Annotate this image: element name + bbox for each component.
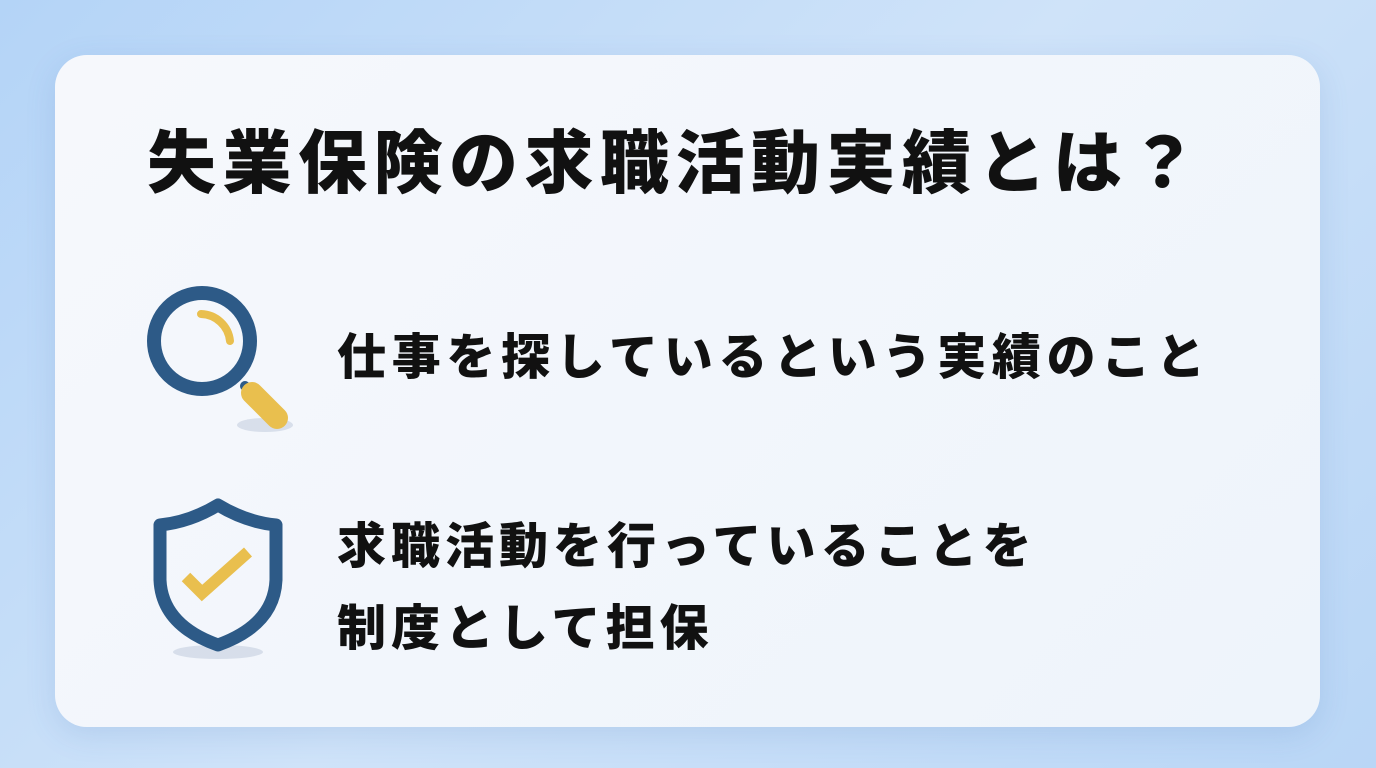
title: 失業保険の求職活動実績とは？	[147, 125, 1204, 202]
text: line 2: 求職活動を行っていることを	[337, 520, 1037, 574]
icon: magnifier	[147, 286, 293, 432]
icon: shield check	[154, 498, 282, 659]
text: line 1: 仕事を探しているという実績のこと	[337, 331, 1211, 385]
text: line 2	[337, 520, 1037, 656]
text: line 2: 制度として担保	[337, 602, 714, 656]
